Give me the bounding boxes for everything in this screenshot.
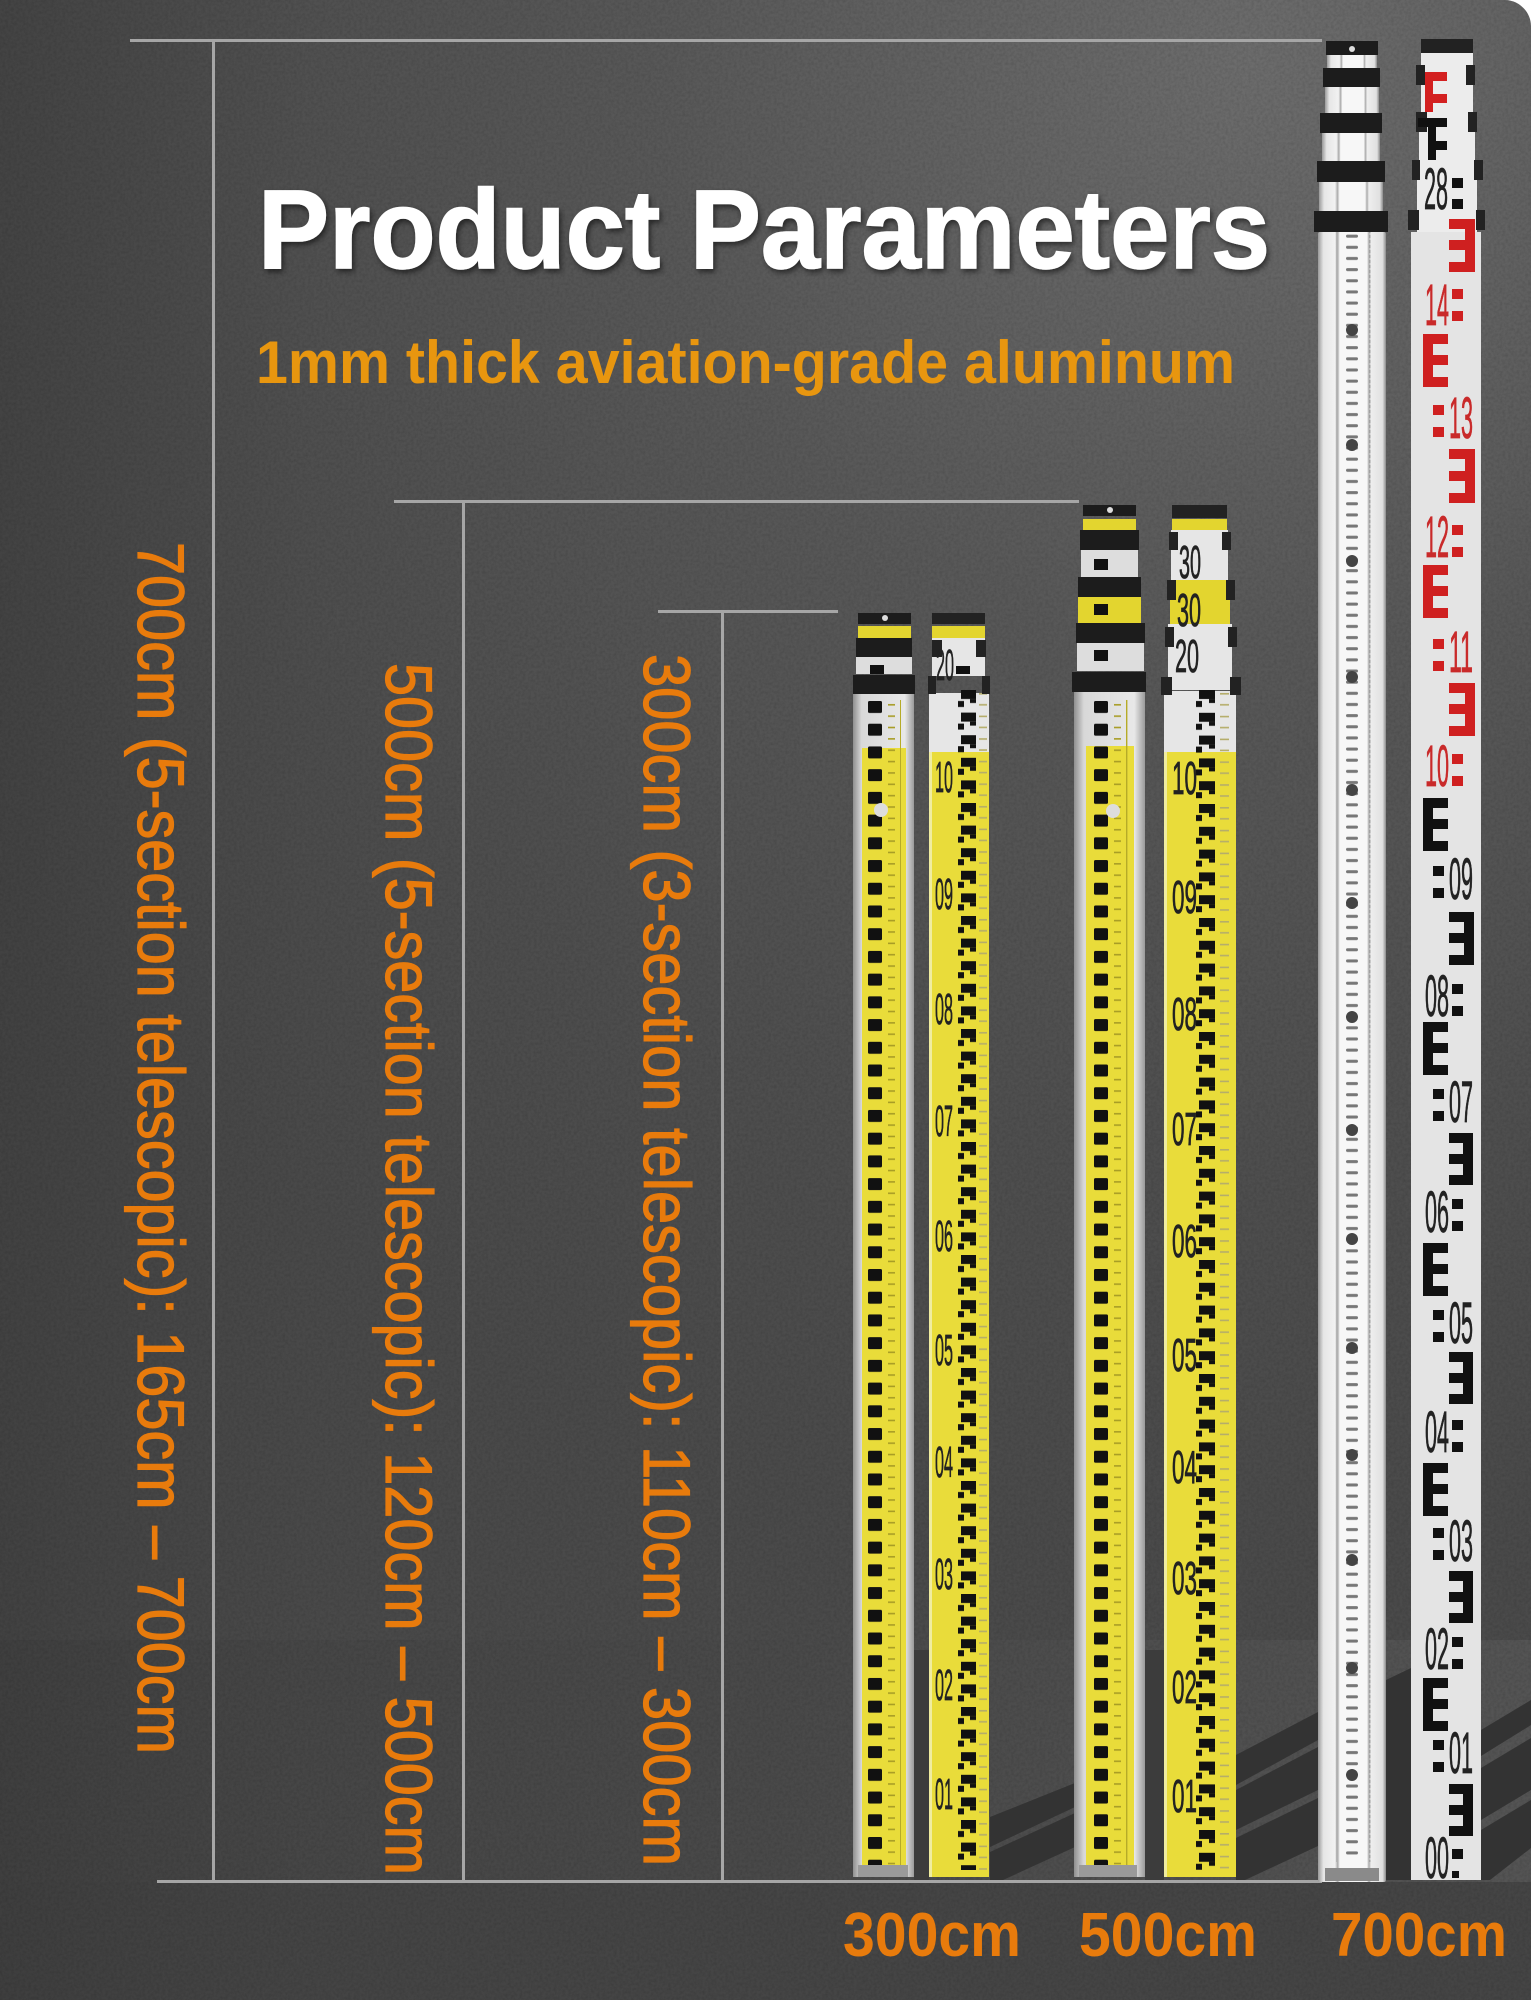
staff: 500cm back (1072, 505, 1146, 1877)
staff: 300cm front: 08 (935, 985, 953, 1034)
scale numbers, red: 10 (1425, 734, 1449, 799)
staff: 300cm front: 04 (935, 1438, 953, 1487)
scale numbers: 02 (1172, 1661, 1197, 1713)
staff: 300cm back (853, 613, 915, 1877)
staff: 700cm front: 09 (1449, 847, 1473, 912)
top marks (1418, 72, 1447, 160)
scale numbers: 10 (1172, 752, 1197, 804)
bottom label: 300cm: 300cm (843, 1901, 1021, 1970)
scale numbers: 04 (1172, 1441, 1197, 1493)
bottom label: 700cm: 700cm (1331, 1901, 1507, 1970)
scale numbers: 05 (1172, 1329, 1197, 1381)
500cm bracket (394, 500, 1079, 1882)
scale numbers: 01 (1172, 1770, 1197, 1822)
staff: 300cm front: 05 (935, 1326, 953, 1375)
black E marks (1423, 798, 1474, 1836)
title: Product Parameters (258, 167, 1270, 292)
staff: 300cm front: 07 (935, 1097, 953, 1146)
floor shadows (914, 1650, 1531, 1880)
scale numbers: 20 (1175, 630, 1199, 682)
vertical label: 300cm: 300cm (3-section telescopic): 110cm – 300cm (630, 654, 704, 1866)
scale numbers, black: 02 (1425, 1617, 1449, 1682)
scale numbers, black: 04 (1425, 1400, 1449, 1465)
scale numbers (935, 641, 954, 1819)
scale dots (1433, 289, 1463, 786)
staff: 300cm front: 09 (935, 870, 953, 919)
staff: 300cm front (928, 613, 990, 1877)
staff: 700cm front: 07 (1449, 1070, 1473, 1135)
staff: 500cm front (1161, 505, 1241, 1877)
staff: 700cm front: 13 (1449, 386, 1473, 451)
red E marks (1423, 219, 1475, 736)
staff: 500cm front: 30 (1179, 536, 1201, 588)
700cm bracket (130, 39, 1322, 1881)
scale numbers: 07 (1172, 1103, 1197, 1155)
scale numbers: 09 (1172, 871, 1197, 923)
scale numbers, red: 14 (1425, 273, 1449, 338)
staff: 300cm front: 02 (935, 1661, 953, 1710)
staff: 700cm back (1314, 41, 1388, 1882)
base line (157, 1880, 1322, 1883)
staff: 300cm front: 10 (935, 753, 953, 802)
scale numbers, black (1424, 157, 1473, 1891)
scale numbers: 03 (1172, 1552, 1197, 1604)
scale numbers: 08 (1172, 988, 1197, 1040)
staff: 700cm front (1408, 39, 1485, 1891)
staff: 300cm front: 06 (935, 1212, 953, 1261)
staff: 700cm front: 03 (1449, 1509, 1473, 1574)
staff: 300cm front: 03 (935, 1550, 953, 1599)
vertical label: 500cm: 500cm (5-section telescopic): 120cm – 500cm (372, 663, 446, 1875)
staff: 700cm front: 01 (1449, 1721, 1473, 1786)
scale numbers, black: 08 (1425, 964, 1449, 1029)
scale numbers: 06 (1172, 1215, 1197, 1267)
scale numbers, red (1425, 273, 1473, 799)
staff: 500cm front: 30 (1177, 584, 1201, 636)
staff: 700cm front: 11 (1449, 620, 1473, 685)
staff: 300cm front: 01 (935, 1770, 953, 1819)
300cm bracket (658, 610, 838, 1882)
staff: 300cm front: 20 (936, 641, 954, 690)
vertical label: 700cm: 700cm (5-section telescopic): 165cm – 700cm (124, 542, 198, 1754)
scale numbers, black: 00 (1425, 1826, 1449, 1891)
staff: 700cm front: 05 (1449, 1291, 1473, 1356)
scale numbers, black: 28 (1424, 157, 1448, 222)
dimension lines (130, 39, 1322, 1883)
subtitle: 1mm thick aviation-grade aluminum (256, 329, 1235, 396)
scale numbers (1172, 536, 1201, 1822)
scale numbers, red: 12 (1425, 505, 1449, 570)
scale numbers, black: 06 (1425, 1180, 1449, 1245)
bottom label: 500cm: 500cm (1079, 1901, 1257, 1970)
